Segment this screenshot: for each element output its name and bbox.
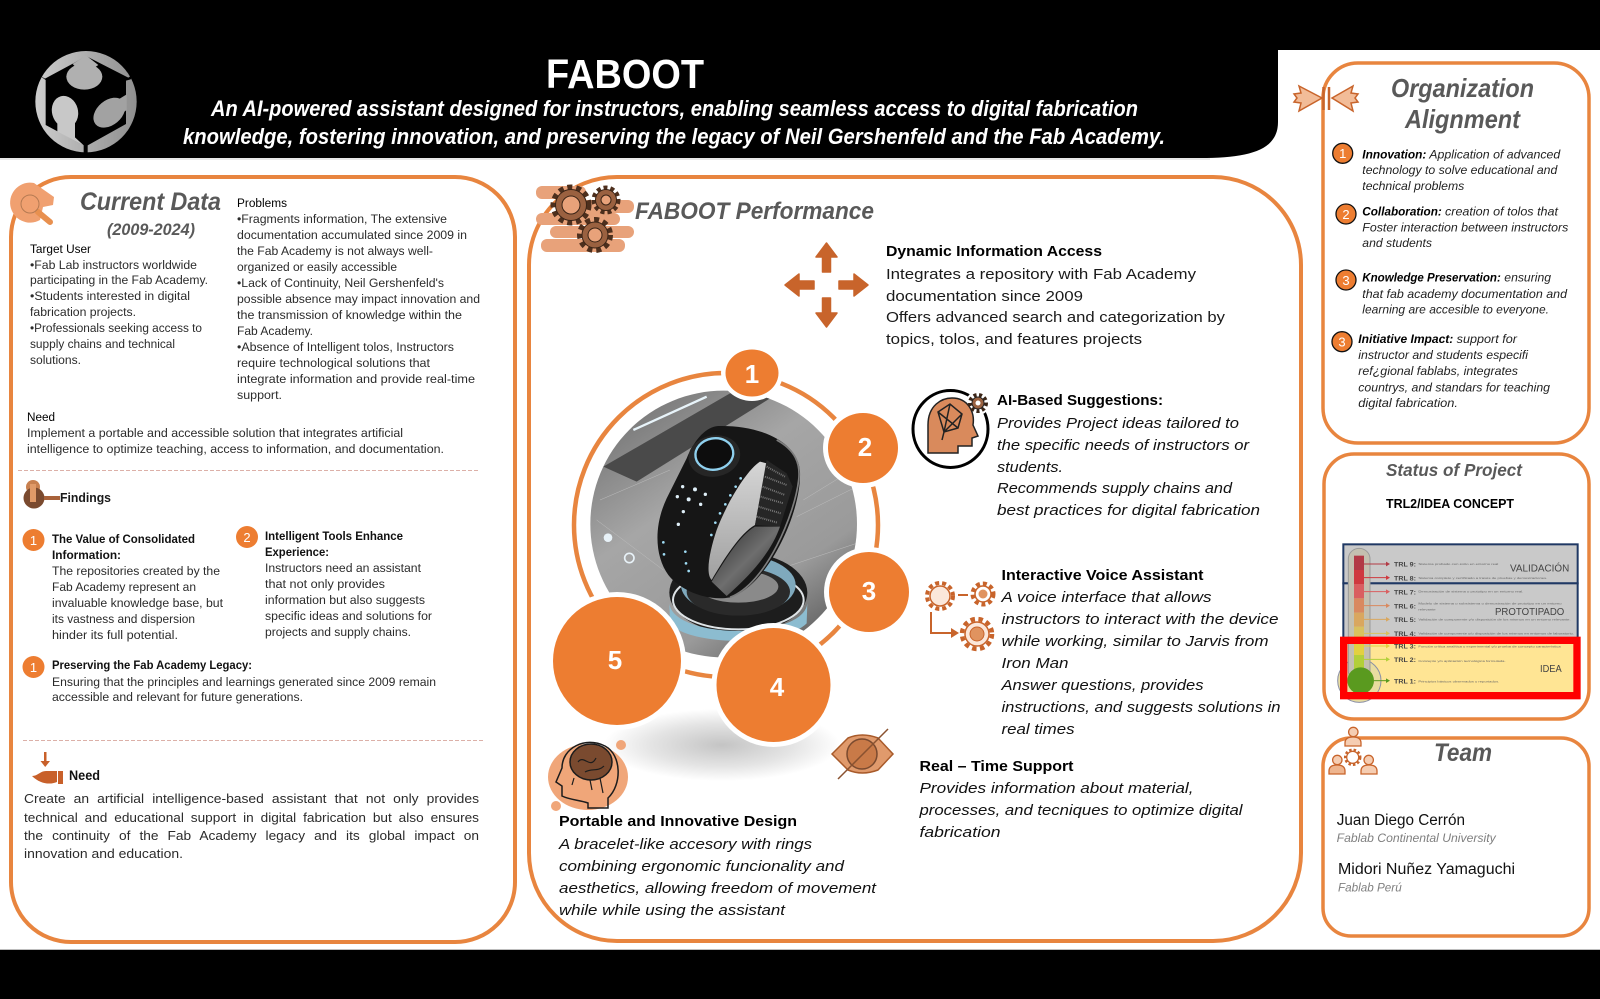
chart: trl thermometer: TRL 7: [1394,590,1416,596]
heading: current data: Current Data [80,188,221,216]
chart: trl thermometer: Demostración de sistema o prototipo en un entorno real. [1418,590,1524,594]
item: collaboration [1336,204,1569,250]
chart: trl thermometer: relevante [1418,607,1436,611]
node 2: 2 [858,432,872,462]
text block: problems: the transmission of knowledge within the [237,308,462,322]
text block: interactive voice assistant: real times [1002,721,1075,738]
text block: ai-based suggestions: Recommends supply chains and [997,480,1233,497]
chart: trl thermometer: Principios básicos observados y reportados. [1418,679,1500,683]
text block: problems: organized or easily accessible [237,260,397,274]
panel: team [1323,727,1589,936]
finding 1: its vastness and dispersion [52,612,195,626]
item: collaboration: 2 [1342,207,1350,222]
text block: dynamic information access: Dynamic Information Access [886,243,1102,260]
text block: problems [237,196,480,402]
heading: organization alignment: Alignment [1404,104,1521,134]
text block: real-time support: processes, and tecniques to optimize digital [918,802,1243,819]
text block: ai-based suggestions: best practices for digital fabrication [997,502,1260,519]
title: FABOOT [546,51,704,97]
icon: four arrows [785,243,868,327]
chart: trl thermometer: Sistema completo y certificado a través de pruebas y demostraciones. [1418,576,1548,580]
icon: hand with arrow [32,752,63,784]
item: knowledge preservation [1336,270,1568,317]
chart: trl thermometer: Concepto y/o aplicación tecnológica formulada. [1418,659,1506,663]
text block: problems: documentation accumulated since 2009 in [237,228,467,242]
text block: real-time support: fabrication [920,824,1000,841]
chart: trl thermometer: TRL 9: [1394,563,1416,569]
text block: interactive voice assistant: Interactive Voice Assistant [1002,567,1204,584]
text block: need paragraph: Create an artificial intelligence-based assistant that not only provides [24,791,480,806]
member: juan diego cerron: Juan Diego Cerrón [1337,812,1465,829]
text block: target user: •Professionals seeking access to [30,321,202,335]
heading: findings: Findings [60,490,111,505]
chart: trl thermometer: Función crítica analítica y experimental y/o prueba de concepto característica [1418,644,1561,648]
finding 2: projects and supply chains. [265,625,411,639]
finding 3: Preserving the Fab Academy Legacy: [52,658,252,672]
item: knowledge preservation: ensuring [1504,272,1552,285]
finding 1: invaluable knowledge base, but [52,596,224,610]
text block: need summary: intelligence to optimize teaching, access to information, and documentation. [27,442,444,456]
text block: portable and innovative design: aesthetics, allowing freedom of movement [559,880,877,897]
item: knowledge preservation: Knowledge Preservation: [1362,272,1501,285]
item: innovation: technical problems [1362,180,1465,193]
text block: problems: the Fab Academy is not always well- [237,244,433,258]
finding 1: Information: [52,548,121,562]
item: innovation: Application of advanced [1428,148,1561,161]
text block: target user: fabrication projects. [30,305,136,319]
text block: problems: possible absence may impact innovation and [237,292,480,306]
node 3: 3 [862,576,876,606]
text block: problems: integrate information and provide real-time [237,372,475,386]
node 1: 1 [745,359,759,389]
chart: trl thermometer: TRL 8: [1394,576,1416,582]
chart: trl thermometer: TRL 2: [1394,658,1416,664]
item: initiative impact [1332,332,1551,410]
text block: interactive voice assistant: instructions, and suggests solutions in [1002,699,1280,716]
heading: organization alignment: Organization [1391,73,1534,103]
item: knowledge preservation: learning are accesible to everyone. [1362,304,1549,317]
text block: target user: supply chains and technical [30,337,175,351]
chart: numbered ring diagram [548,345,914,781]
icon: light bulb [24,480,60,508]
text block: interactive voice assistant: Iron Man [1002,655,1068,672]
chart: trl thermometer: VALIDACIÓN [1510,562,1569,575]
member: juan diego cerron [1337,812,1497,845]
text block: portable and innovative design: Portable and Innovative Design [559,813,797,830]
member: juan diego cerron: Fablab Continental University [1337,833,1497,845]
header band [0,0,1600,159]
subheading: trl level: TRL2/IDEA CONCEPT [1386,497,1514,511]
finding 1: hinder its full potential. [52,628,178,642]
subtitle [183,96,1165,149]
text block: ai-based suggestions: Provides Project ideas tailored to [997,415,1239,432]
text block: problems: •Absence of Intelligent tolos, Instructors [237,340,454,354]
finding 1: The repositories created by the [52,564,220,578]
text block: problems: Problems [237,196,287,210]
item: innovation: 1 [1339,146,1346,161]
member: midori nunez yamaguchi [1338,861,1515,895]
text block: need paragraph: the continuity of the Fab Academy legacy and its global impact on [24,828,479,843]
footer band [0,949,1600,999]
item: initiative impact: countrys, and standars for teaching [1358,382,1551,395]
finding 2: that not only provides [265,577,385,591]
text block: target user: •Students interested in digital [30,289,190,303]
text block: ai-based suggestions [997,392,1260,519]
finding 3: Ensuring that the principles and learnings generated since 2009 remain [52,675,436,689]
heading: current data: (2009-2024) [107,220,195,239]
item: knowledge preservation: 3 [1342,273,1350,288]
subtitle: knowledge, fostering innovation, and preserving the legacy of Neil Gershenfeld and the Fab Academy. [183,124,1165,149]
finding 2 [236,526,432,639]
finding 1 [22,529,224,642]
finding 2: information but also suggests [265,593,425,607]
finding 1: The Value of Consolidated [52,532,195,546]
text block: need paragraph: innovation and education. [24,846,183,861]
finding 3 [22,656,436,704]
icon: fab lab logo [35,51,137,153]
item: initiative impact: instructor and students especifi [1358,349,1528,362]
text block: target user: solutions. [30,353,81,367]
text block: target user [30,242,208,367]
drop shadow [604,709,840,781]
item: knowledge preservation: that fab academy documentation and [1362,288,1568,301]
text block: interactive voice assistant: instructors to interact with the device [1002,611,1278,628]
icon: team [1329,727,1377,774]
chart: trl thermometer: Sistema probado con éxito en entorno real [1418,562,1499,566]
item: innovation: technology to solve educational and [1362,164,1558,177]
text block: problems: Fab Academy. [237,324,313,338]
text block: need paragraph [24,791,480,861]
text block: portable and innovative design: A bracelet-like accesory with rings [558,836,812,853]
item: initiative impact: support for [1457,333,1518,346]
item: innovation: Innovation: [1362,148,1426,161]
node 3 [824,547,914,637]
icon: ai head [913,390,990,468]
icon: voice gears workflow [927,583,994,649]
node 4 [712,623,836,747]
text block: need summary: Implement a portable and accessible solution that integrates artificial [27,426,403,440]
item: initiative impact: Initiative Impact: [1358,333,1453,346]
heading: team: Team [1434,739,1492,767]
text block: ai-based suggestions: students. [997,459,1063,476]
item: initiative impact: digital fabrication. [1358,397,1458,410]
text block: dynamic information access: documentation since 2009 [886,288,1083,305]
icon: converging arrows [1294,86,1358,111]
text block: real-time support [918,758,1243,841]
heading: current data [80,188,221,239]
chart: trl thermometer: Modelo de sistema o subsistema o demostración de prototipo en un entorno [1418,602,1562,606]
finding 2: Instructors need an assistant [265,561,422,575]
node 2 [823,408,903,488]
text block: real-time support: Provides information about material, [920,780,1194,797]
panel: organization alignment [1294,63,1589,443]
finding 3: accessible and relevant for future generations. [52,690,303,704]
text block: dynamic information access: Offers advanced search and categorization by [886,309,1225,326]
member: midori nunez yamaguchi: Fablab Perú [1338,883,1402,895]
text block: real-time support: Real – Time Support [920,758,1074,775]
text block: problems: require technological solutions that [237,356,431,370]
text block: target user: participating in the Fab Academy. [30,273,208,287]
chart: trl thermometer: Validación de componente y/o disposición de los mismos en un entorno relevante. [1418,618,1571,622]
finding 3: 1 [30,660,37,675]
text block: problems: •Fragments information, The extensive [237,212,447,226]
chart: trl thermometer: TRL 6: [1394,604,1416,610]
panel: faboot performance [529,177,1301,941]
text block: interactive voice assistant: Answer questions, provides [1000,677,1204,694]
node 5 [548,592,686,730]
finding 1: Fab Academy represent an [52,580,196,594]
chart: trl thermometer: PROTOTIPADO [1495,607,1565,618]
item: innovation [1333,143,1561,193]
heading: status of project: Status of Project [1386,460,1523,480]
node 5: 5 [608,645,622,675]
item: collaboration: and students [1362,237,1432,250]
chart: trl thermometer: TRL 5: [1394,618,1416,624]
text block: dynamic information access [886,243,1225,348]
item: collaboration: Foster interaction between instructors [1362,222,1569,235]
text block: portable and innovative design [558,813,877,919]
text block: need summary [27,410,444,456]
node 1 [721,345,783,401]
text block: target user: Target User [30,242,91,256]
text block: portable and innovative design: combining ergonomic funcionality and [559,858,845,875]
node 4: 4 [770,672,785,702]
icon: eye with slash [832,729,893,779]
chart: trl thermometer: Validación de componente y/o disposición de los mismos en entornos de laboratorio. [1418,632,1574,636]
finding 2: Experience: [265,545,329,559]
text block: dynamic information access: topics, tolos, and features projects [886,331,1142,348]
chart: trl thermometer [1338,544,1578,702]
chart: trl thermometer: TRL 3: [1394,645,1416,651]
icon: magnifier data [10,183,54,223]
chart: trl thermometer: IDEA [1540,664,1562,675]
item: collaboration: creation of tolos that [1445,206,1559,219]
finding 2: specific ideas and solutions for [265,609,432,623]
text block: interactive voice assistant: while working, similar to Jarvis from [1002,633,1268,650]
orbit ring [574,373,878,677]
icon: brain head [548,740,628,811]
finding 2: Intelligent Tools Enhance [265,529,403,543]
text block: ai-based suggestions: the specific needs of instructors or [997,437,1250,454]
chart: trl thermometer: TRL 4: [1394,632,1416,638]
finding 1: 1 [30,533,37,548]
panel: current data [10,177,515,942]
chart: trl thermometer: TRL 1: [1394,679,1416,685]
text block: ai-based suggestions: AI-Based Suggestions: [997,392,1163,409]
text block: portable and innovative design: while while using the assistant [559,902,786,919]
item: collaboration: Collaboration: [1362,206,1442,219]
item: initiative impact: 3 [1338,334,1346,350]
text block: target user: •Fab Lab instructors worldwide [30,258,197,272]
finding 2: 2 [243,530,251,545]
text block: interactive voice assistant [1000,567,1280,738]
heading: need: Need [69,768,100,783]
subtitle: An AI-powered assistant designed for instructors, enabling seamless access to digital fabrication [210,96,1138,121]
heading: organization alignment [1391,73,1534,134]
text block: need paragraph: technical and educational support in digital fabrication but also ensures [24,810,480,825]
text block: interactive voice assistant: A voice interface that allows [1000,589,1212,606]
text block: need summary: Need [27,410,55,424]
panel: status of project [1324,454,1589,719]
heading: faboot performance: FABOOT Performance [635,198,874,225]
member: midori nunez yamaguchi: Midori Nuñez Yamaguchi [1338,861,1515,878]
image: smart ring photo [583,383,863,663]
text block: problems: •Lack of Continuity, Neil Gershenfeld's [237,276,444,290]
text block: dynamic information access: Integrates a repository with Fab Academy [886,266,1196,283]
text block: problems: support. [237,388,282,402]
item: initiative impact: ref¿gional fablabs, integrates [1358,365,1518,378]
icon: gears [536,186,634,252]
